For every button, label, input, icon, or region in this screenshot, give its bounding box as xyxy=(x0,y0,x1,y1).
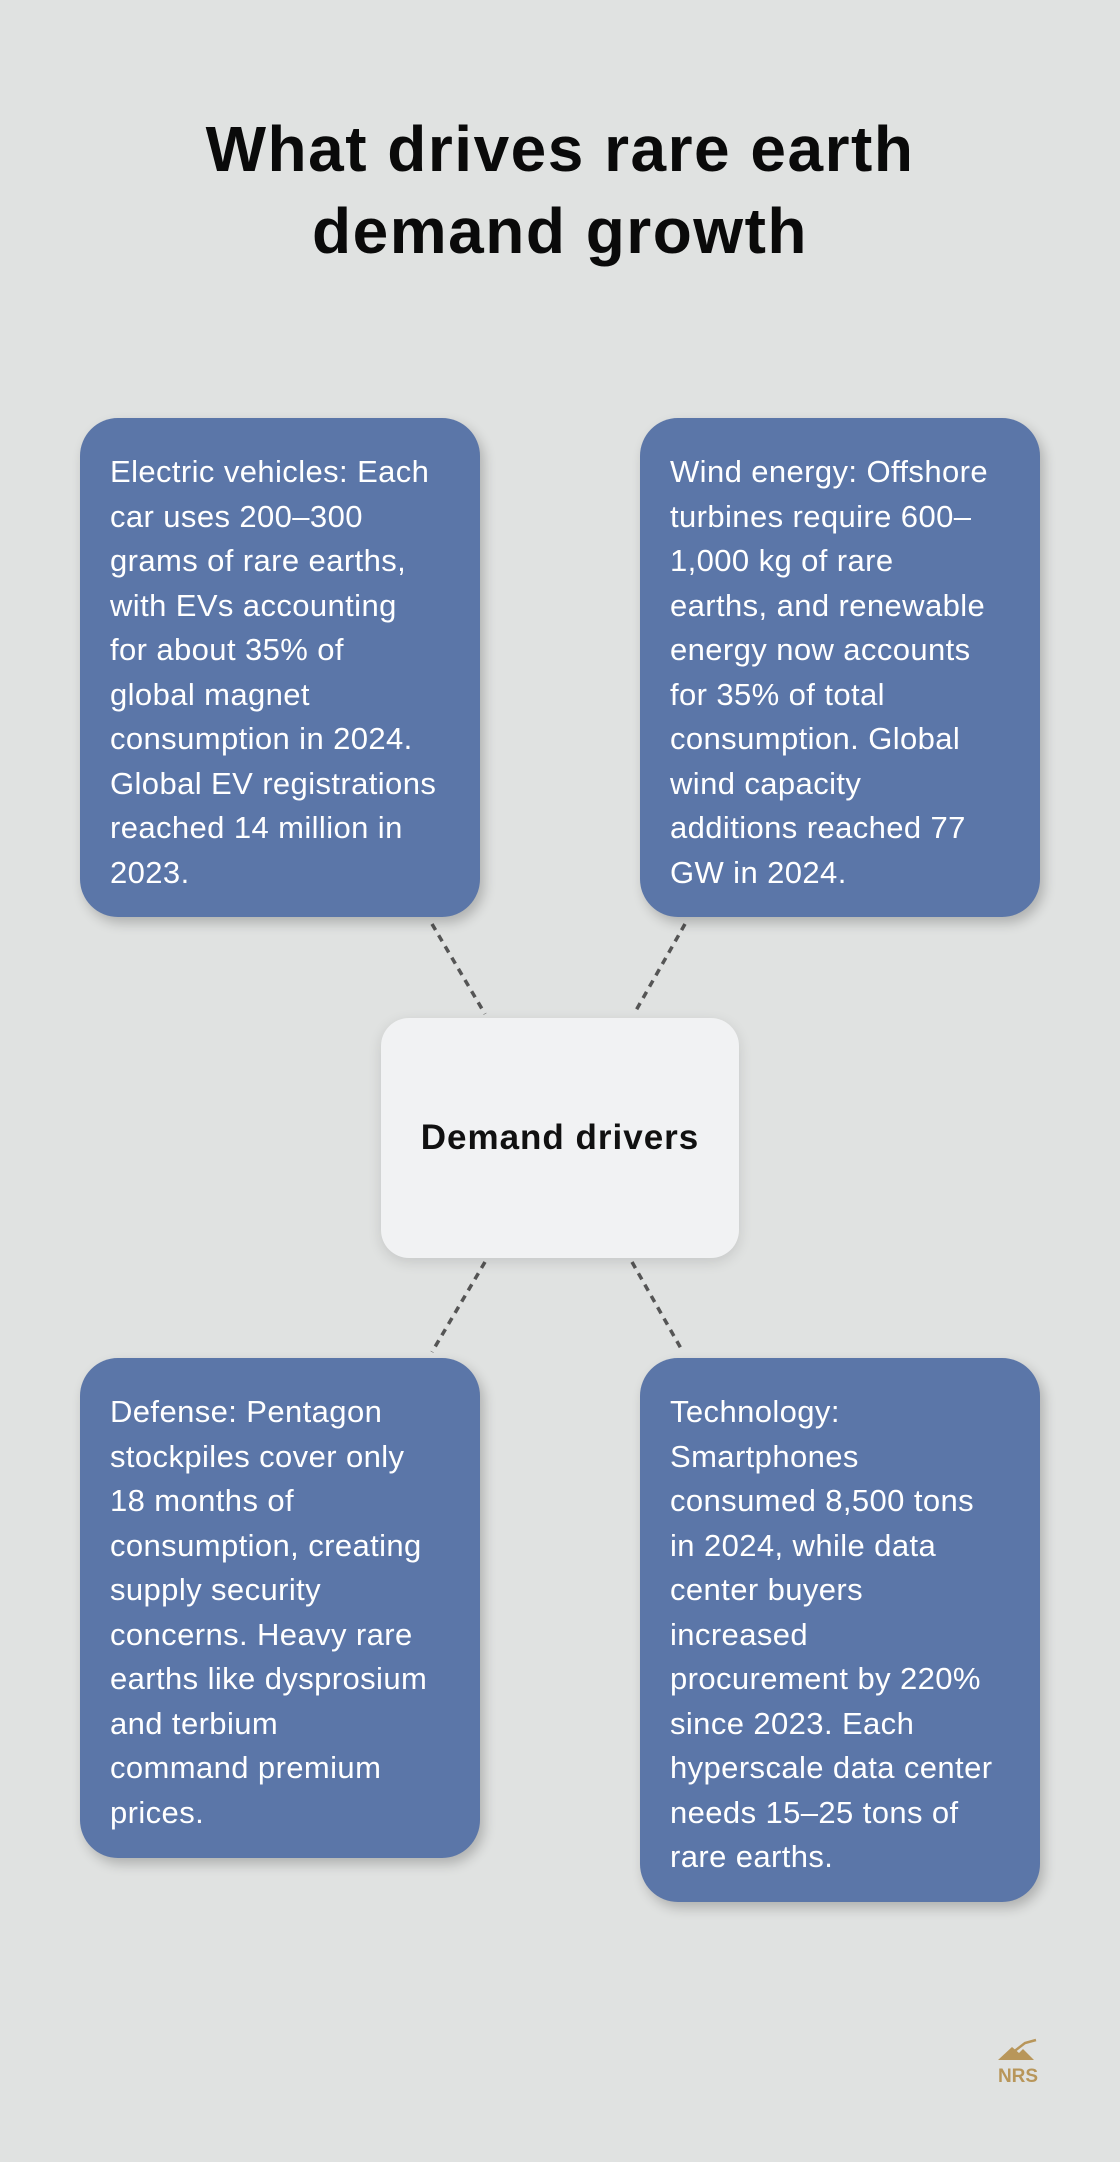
panel: wind energy: Wind energy: Offshore xyxy=(670,454,988,489)
panel: defense: command premium xyxy=(110,1750,381,1785)
title: What drives rare earth xyxy=(206,113,914,185)
panel: defense: earths like dysprosium xyxy=(110,1661,427,1696)
panel: technology: Smartphones xyxy=(670,1438,859,1474)
panel: technology: Technology: xyxy=(670,1394,840,1429)
panel: defense: consumption, creating xyxy=(110,1528,422,1562)
panel: electric vehicles: grams of rare earths, xyxy=(110,543,406,578)
panel: defense xyxy=(80,1358,480,1858)
panel: wind energy: turbines require 600– xyxy=(670,498,971,534)
panel: electric vehicles: reached 14 million in xyxy=(110,810,403,845)
panel: defense: concerns. Heavy rare xyxy=(110,1616,413,1652)
panel: wind energy: earths, and renewable xyxy=(670,588,985,622)
logo: NRS xyxy=(998,2038,1038,2087)
panel: wind energy: for 35% of total xyxy=(670,676,885,712)
panel: electric vehicles: 2023. xyxy=(110,854,190,890)
panel: electric vehicles xyxy=(80,418,480,917)
panel: defense: stockpiles cover only xyxy=(110,1438,404,1474)
panel: wind energy: additions reached 77 xyxy=(670,810,966,845)
panel: electric vehicles: Global EV registrations xyxy=(110,766,436,800)
panel: defense: and terbium xyxy=(110,1706,278,1740)
panel: electric vehicles: consumption in 2024. xyxy=(110,721,413,756)
panel: wind energy: wind capacity xyxy=(670,766,861,800)
title xyxy=(206,113,914,267)
panel: electric vehicles: Electric vehicles: Each xyxy=(110,454,429,489)
panel: technology: hyperscale data center xyxy=(670,1750,992,1785)
logo: NRS: NRS xyxy=(998,2066,1038,2087)
panel: technology xyxy=(640,1358,1040,1902)
panel: wind energy: 1,000 kg of rare xyxy=(670,543,894,578)
panel: wind energy: consumption. Global xyxy=(670,721,960,756)
panel: wind energy: energy now accounts xyxy=(670,632,971,667)
panel: technology: consumed 8,500 tons xyxy=(670,1483,974,1518)
panel: defense: supply security xyxy=(110,1572,321,1607)
panel: technology: rare earths. xyxy=(670,1839,833,1874)
panel: technology: in 2024, while data xyxy=(670,1528,936,1562)
center node xyxy=(381,1018,739,1258)
panel: electric vehicles: for about 35% of xyxy=(110,632,344,667)
panel: defense: prices. xyxy=(110,1794,204,1830)
title: demand growth xyxy=(312,195,808,267)
panel: technology: increased xyxy=(670,1616,808,1652)
center node: Demand drivers xyxy=(421,1118,699,1157)
panel: defense: 18 months of xyxy=(110,1483,294,1518)
panel: technology: needs 15–25 tons of xyxy=(670,1794,959,1830)
panel: wind energy: GW in 2024. xyxy=(670,854,847,890)
panel: electric vehicles: car uses 200–300 xyxy=(110,498,363,534)
panel: technology: procurement by 220% xyxy=(670,1661,981,1696)
panel: wind energy xyxy=(640,418,1040,917)
panel: defense: Defense: Pentagon xyxy=(110,1394,382,1429)
panel: electric vehicles: with EVs accounting xyxy=(110,588,397,622)
panel: technology: center buyers xyxy=(670,1572,863,1607)
panel: technology: since 2023. Each xyxy=(670,1706,914,1740)
panel: electric vehicles: global magnet xyxy=(110,676,310,712)
